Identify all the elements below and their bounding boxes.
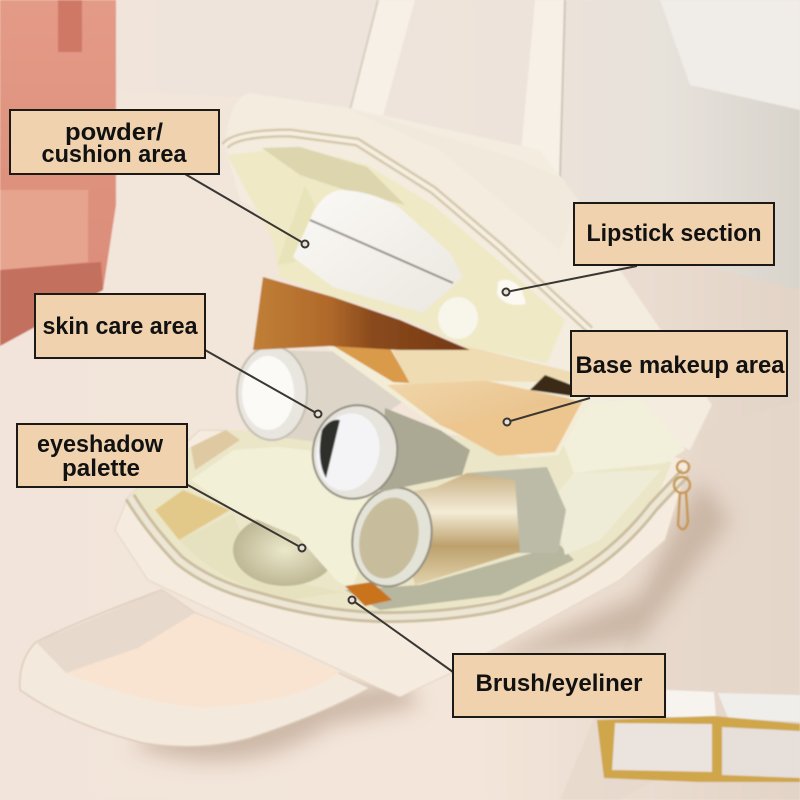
upper interior and zipper [225,133,590,363]
label: powder/cushion area [10,110,219,174]
label: Base makeup area: Base makeup area [576,352,785,379]
label: eyeshadow palette: eyeshadow [37,431,163,458]
upper shell [225,93,712,450]
lower shell [115,430,690,697]
soft shadows on table [130,480,730,761]
lower interior [130,400,685,617]
label: Base makeup area [571,331,787,396]
label: eyeshadow palette: palette [62,455,140,482]
label: Lipstick section: Lipstick section [586,220,762,247]
lower zipper [130,473,685,617]
white compact [293,190,526,339]
pink bag in background [0,0,116,346]
top handles [350,0,565,178]
gold jar [342,467,566,595]
lipstick box [597,690,800,782]
label: skin care area [35,294,205,358]
clear jars [237,346,470,508]
label: powder/cushion area: cushion area [42,141,187,168]
label: eyeshadow palette [17,424,187,487]
leader lines [185,174,637,672]
flap lower lip and base tubes [321,340,617,458]
bottom handle [20,590,370,747]
leader dots [298,240,510,604]
amber tube [253,277,470,350]
label: skin care area: skin care area [42,313,198,340]
label: Brush/eyeliner: Brush/eyeliner [476,670,642,697]
label: Brush/eyeliner [453,654,665,717]
zipper pull [674,461,690,529]
label: powder/cushion area: powder/ [65,119,163,146]
label: Lipstick section [574,203,774,265]
